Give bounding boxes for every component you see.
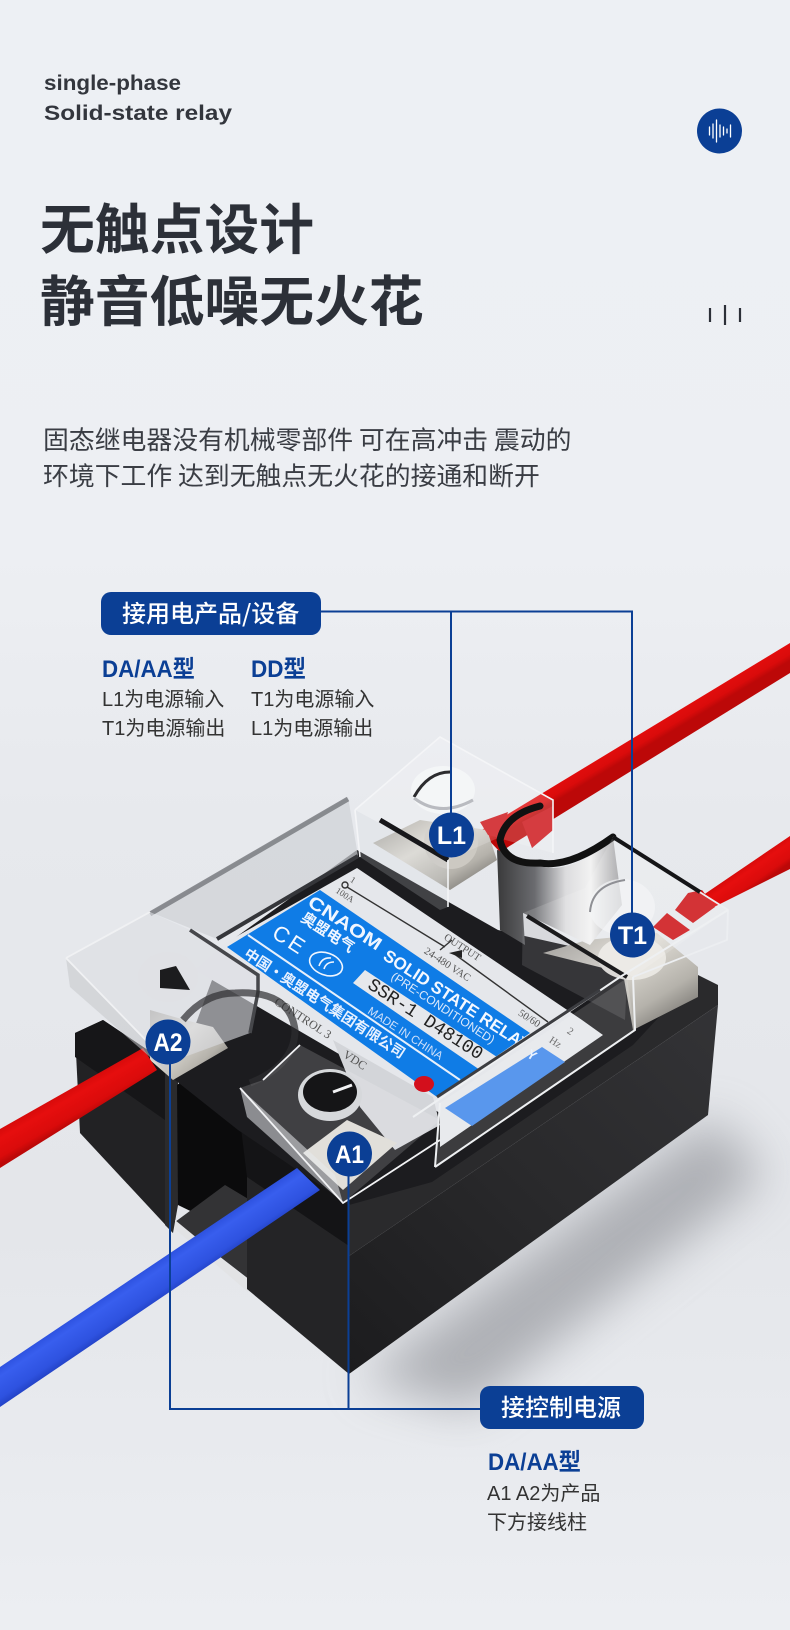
callout text: DD type: T1为电源输入 [251,688,374,711]
callout text: DA/AA type [102,656,225,740]
terminal badge T1 [610,912,655,958]
label white divider line [248,935,460,1080]
glass cover L1 block [355,737,553,910]
label white strip seen through cover [195,868,603,1147]
connector lines: upper [321,612,632,915]
label text [240,892,534,1063]
callout text: DD type: L1为电源输出 [251,717,373,740]
terminal badge T1: T1 [618,922,647,950]
terminal screw L1 [424,815,478,869]
label text: CE [268,920,312,960]
base centre slot [175,1040,250,1292]
blue wire [0,1168,320,1407]
label text: MADE IN CHINA [365,1005,445,1063]
callout text: control terminals: 下方接线柱 [487,1511,587,1534]
label small print: OUTPUT [442,932,483,964]
label text: 中国·奥盟电气集团有限公司 [240,943,410,1063]
label small print: 24-480 VAC [422,946,472,984]
control strip under glass [333,1040,440,1150]
callout pill: control power: 接控制电源 [501,1388,621,1423]
terminal badge A2 [146,1020,190,1064]
glass cover T1 block [522,837,728,1020]
label model text: SSR-1 D48100 [363,975,487,1065]
base top lip [349,975,718,1256]
label small print: VDC [341,1047,369,1073]
red wire upper right [480,643,790,852]
subtitle: english [44,72,232,125]
label CCC mark [306,948,346,980]
label text: (PRE-CONDITIONED) [389,969,497,1047]
description paragraph: 环境下工作 达到无触点无火花的接通和断开 [43,456,540,493]
connector lines: lower [170,1060,480,1409]
label small print: 1 [348,875,358,885]
label model plate [353,970,497,1070]
base left block [75,1020,178,1233]
callout text: DA/AA type: T1为电源输出 [102,717,225,740]
label red LED [414,1076,434,1092]
red wire left [0,1048,157,1168]
terminal L1 metal [373,820,497,890]
callout text: control terminals: A1 A2为产品 [487,1482,600,1505]
label small print: 50/60 [516,1008,542,1030]
base right face [349,1005,718,1374]
description paragraph: 固态继电器没有机械零部件 可在高冲击 震动的 [43,420,571,457]
terminal badge L1: L1 [437,822,466,850]
callout pill: load equipment [101,592,321,635]
callout text: control terminals: DA/AA型 [488,1449,581,1476]
relay top plate [175,850,698,1205]
label Y letter: Y [524,1046,540,1064]
label text: SOLID STATE RELAY [380,946,534,1055]
label small print: Hz [547,1035,563,1051]
label blue continuation [445,1047,565,1126]
label text: 奥盟电气 [297,907,359,957]
red wire lower right [690,836,790,908]
glass cover long back strip [150,797,358,939]
callout text: DA/AA type: L1为电源输入 [102,688,224,711]
icon: sound wave badge [697,108,742,154]
base front-left face [247,1130,349,1374]
glass cover A2 block [66,912,258,1072]
glass cover long front side [413,910,728,1167]
label blue band [227,890,530,1097]
callout text: control terminals [487,1449,600,1534]
terminal T1 metal [543,933,698,1030]
terminal badge A1 [327,1132,372,1176]
glass cover black notch curve [500,806,613,864]
floor shadow [360,1118,765,1410]
subtitle: english: single-phase [44,72,181,95]
glass cover A2 dark curve [183,993,295,1083]
title: 静音低噪无火花 [40,257,424,337]
callout pill: load equipment: 接用电产品/设备 [122,594,299,629]
red seen in glass [480,806,715,940]
centre metal cylinder [497,837,622,945]
product illustration: relay with glass cover and wires [0,643,790,1410]
base top left shade [240,1120,349,1246]
callout text: DA/AA type: DA/AA型 [102,656,195,683]
terminal A1 metal [303,1120,397,1190]
label small print: CONTROL 3 [272,994,334,1042]
label text: CNAOM [304,892,386,954]
label small print: 2 [565,1026,575,1038]
terminal badge A2: A2 [154,1029,182,1057]
subtitle: english: Solid-state relay [44,102,232,125]
label small print [272,875,575,1073]
terminal A2 metal [150,1010,228,1080]
terminal badge L1 [429,812,474,858]
decorative tick icon [710,305,740,325]
title [40,185,424,337]
callout text: DD type: DD型 [251,656,306,683]
terminal T1 highlight [598,936,666,980]
terminal badge A1: A1 [335,1141,364,1169]
title: 无触点设计 [40,185,314,265]
label output symbol [342,882,548,1022]
callout pill: control power [480,1386,644,1429]
callout text: DD type [251,656,374,740]
description paragraph [43,420,571,493]
label triangle mark [449,950,462,958]
label small print: 100A [334,885,357,905]
glass cover A1 block [240,1045,440,1203]
